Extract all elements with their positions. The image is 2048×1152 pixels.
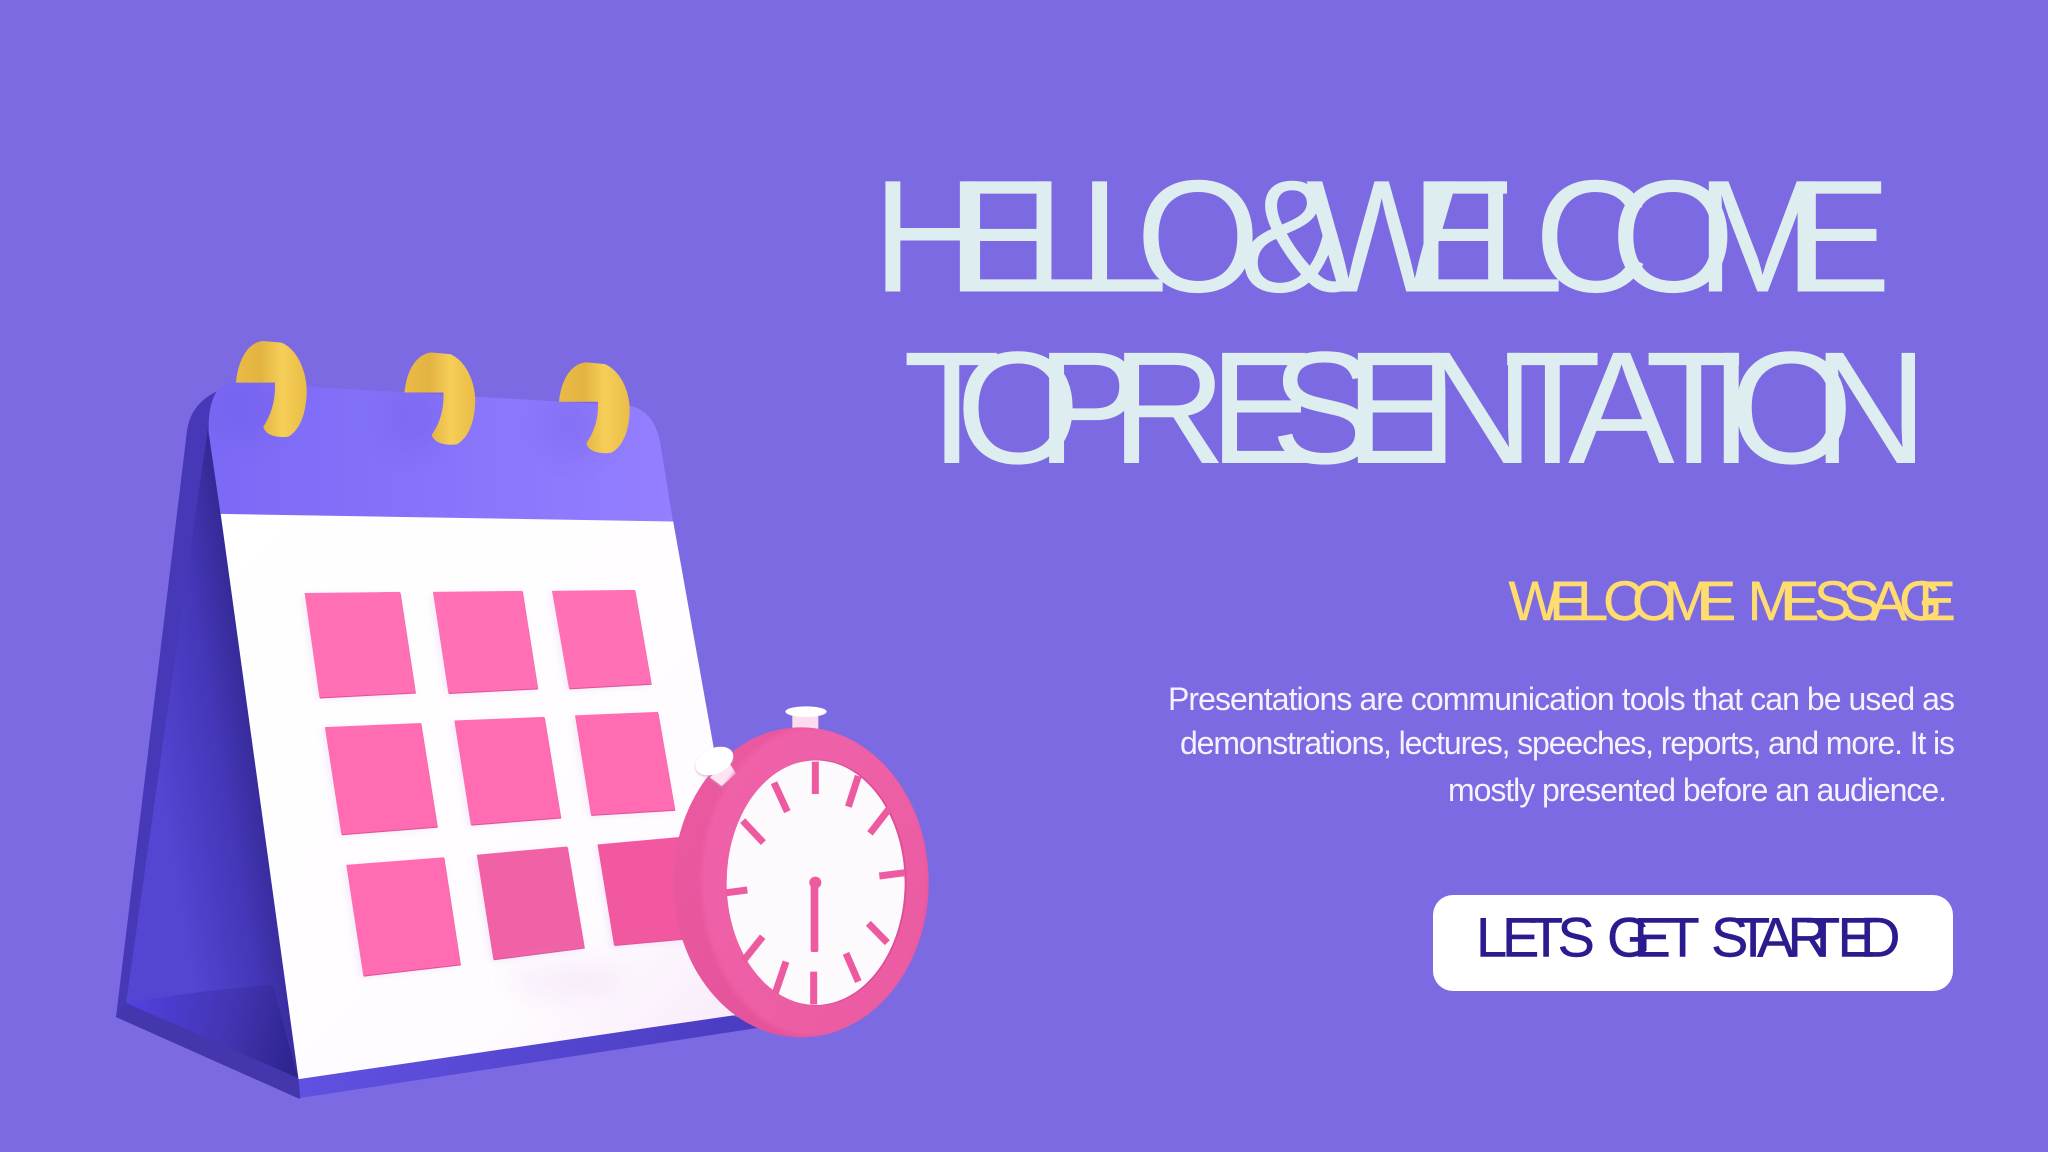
body line 3: mostly presented before an audience. — [1448, 772, 1947, 808]
calendar white page — [221, 514, 761, 1079]
calendar front bottom strip — [299, 1015, 766, 1098]
button label: LETS GET STARTED — [1476, 906, 1900, 969]
stand inner panel — [126, 420, 298, 1078]
ring 2 — [404, 353, 475, 445]
watch face recess — [728, 760, 907, 1006]
hand stem — [811, 883, 818, 952]
ring shadows on header — [560, 412, 586, 438]
watch front bezel — [701, 728, 929, 1037]
calendar body — [209, 371, 766, 1098]
body line 2: demonstrations, lectures, speeches, reports, and more. It is — [1180, 725, 1955, 761]
title line 2: TO PRESENTATION — [903, 318, 1928, 497]
button stem — [710, 762, 736, 786]
subheading: WELCOME MESSAGE — [1508, 569, 1956, 632]
clock ticks — [727, 762, 905, 1004]
crown stem — [792, 714, 818, 731]
stopwatch — [673, 706, 929, 1037]
stand floor — [126, 985, 298, 1078]
title — [872, 146, 1928, 497]
button: lets get started — [1433, 895, 1953, 991]
calendar rings — [236, 341, 630, 453]
button background — [1433, 895, 1953, 991]
watch side rim — [673, 727, 929, 1037]
calendar date squares — [305, 590, 687, 976]
crown cap — [785, 706, 827, 717]
ring 3 — [559, 362, 630, 453]
stand base edge — [116, 1003, 300, 1099]
body line 1: Presentations are communication tools that can be used as — [1168, 681, 1955, 717]
top crown — [785, 706, 827, 731]
square row 3 — [346, 836, 687, 976]
calendar header panel — [209, 382, 673, 523]
body paragraph — [1168, 681, 1955, 808]
watch white face — [727, 760, 905, 1005]
calendar back stand — [116, 383, 320, 1099]
illustration: desk calendar with stopwatch — [116, 341, 929, 1099]
ring 1 — [236, 341, 307, 437]
side button — [691, 741, 738, 786]
hand pivot — [809, 877, 821, 889]
stopwatch shadow on page — [506, 962, 627, 999]
stand outer rim — [116, 383, 320, 1099]
clock hand — [809, 877, 821, 952]
square row 1 — [305, 590, 651, 698]
square row 2 — [325, 712, 675, 834]
title line 1: HELLO & WELCOME — [872, 146, 1891, 326]
button cap — [691, 741, 738, 781]
